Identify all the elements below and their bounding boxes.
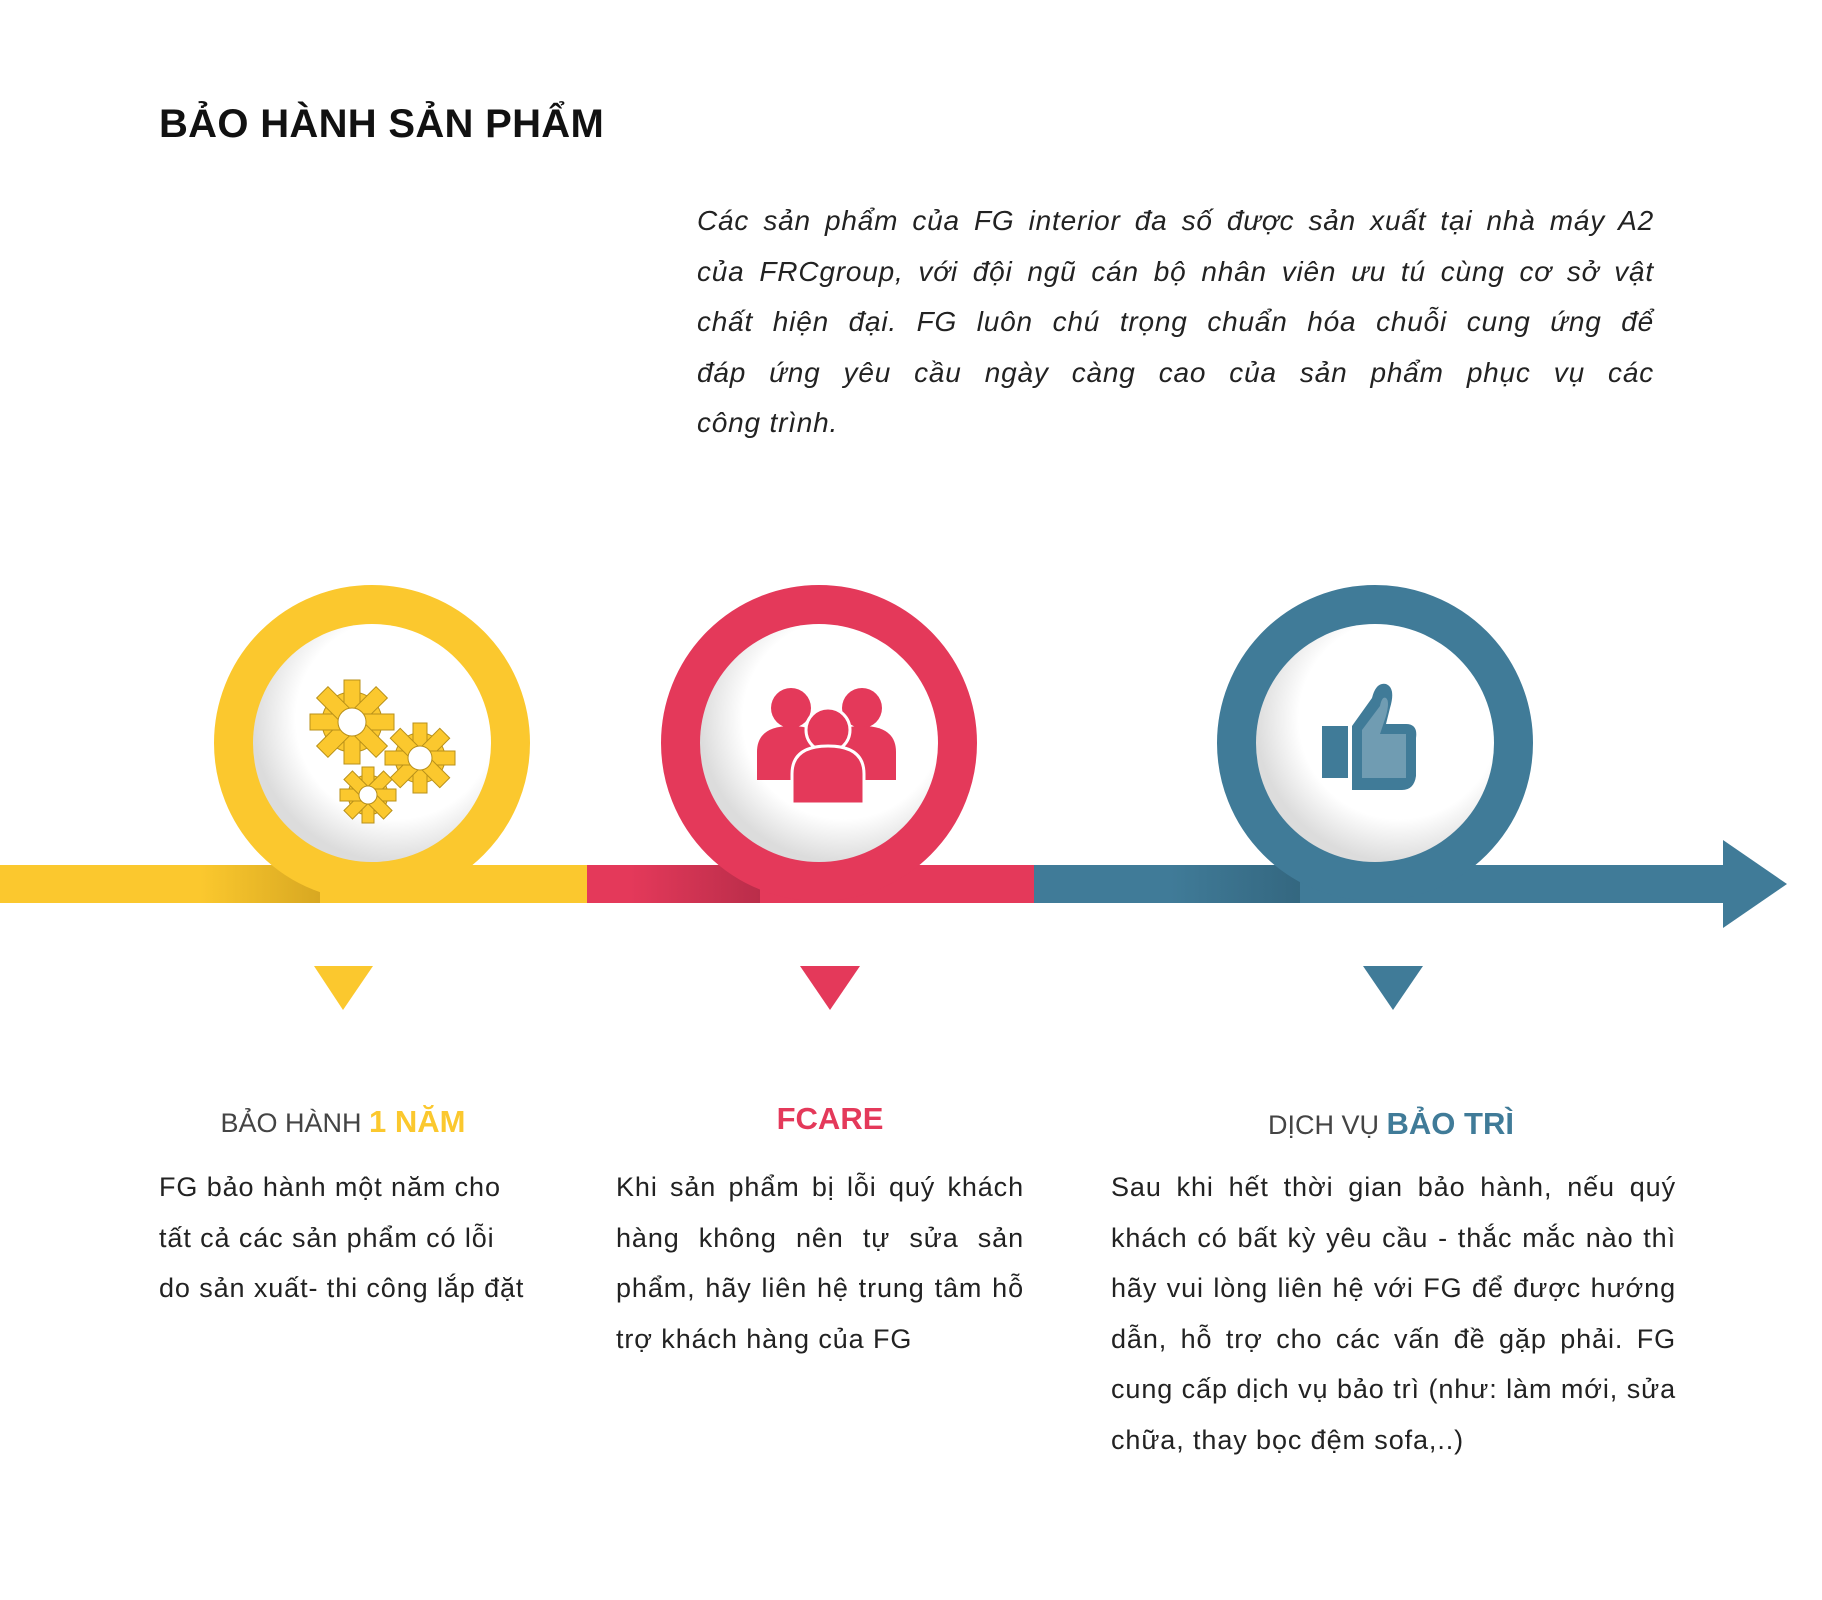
heading: maintenance: DỊCH VỤ BẢO TRÌ bbox=[1268, 1106, 1514, 1141]
intro text: chất hiện đại. FG luôn chú trọng chuẩn hóa chuỗi cung ứng để bbox=[697, 306, 1654, 337]
ring: blue bbox=[1237, 605, 1513, 881]
title: BẢO HÀNH SẢN PHẨM bbox=[159, 102, 604, 146]
heading: 1 year warranty: BẢO HÀNH 1 NĂM bbox=[220, 1104, 465, 1139]
text: warranty: FG bảo hành một năm cho bbox=[159, 1172, 501, 1202]
bar: blue arrow bbox=[1034, 840, 1787, 928]
pointer: yellow bbox=[314, 966, 373, 1010]
text: warranty: do sản xuất- thi công lắp đặt bbox=[159, 1273, 524, 1303]
text: warranty bbox=[159, 1172, 524, 1303]
ring: yellow bbox=[234, 605, 510, 881]
heading: FCARE: FCARE bbox=[777, 1101, 883, 1136]
intro text: công trình. bbox=[697, 407, 838, 438]
pointer: blue bbox=[1363, 966, 1423, 1010]
intro text: của FRCgroup, với đội ngũ cán bộ nhân viên ưu tú cùng cơ sở vật bbox=[697, 256, 1654, 286]
text: warranty: tất cả các sản phẩm có lỗi bbox=[159, 1222, 495, 1252]
intro text bbox=[697, 205, 1654, 438]
icon: gears bbox=[310, 680, 455, 823]
pointer: red bbox=[800, 966, 860, 1010]
intro text: Các sản phẩm của FG interior đa số được sản xuất tại nhà máy A2 bbox=[697, 205, 1654, 236]
icon: thumbs up bbox=[1322, 684, 1416, 790]
text: fcare: Khi sản phẩm bị lỗi quý khách hàng không nên tự sửa sản phẩm, hãy liên hệ trung tâm hỗ trợ khách hàng của FG bbox=[616, 1172, 1024, 1354]
bar: yellow segment bbox=[0, 865, 587, 903]
icon: people bbox=[757, 688, 896, 804]
text: maintenance: Sau khi hết thời gian bảo hành, nếu quý khách có bất kỳ yêu cầu - thắc mắc nào thì hãy vui lòng liên hệ với FG để được hướng dẫn, hỗ trợ cho các vấn đề gặp phải. FG cung cấp dịch vụ bảo trì (như: làm mới, sửa chữa, thay bọc đệm sofa,..) bbox=[1111, 1172, 1676, 1454]
ring: red bbox=[681, 605, 957, 881]
intro text: đáp ứng yêu cầu ngày càng cao của sản phẩm phục vụ các bbox=[697, 356, 1654, 388]
bar: red segment bbox=[587, 865, 1034, 903]
